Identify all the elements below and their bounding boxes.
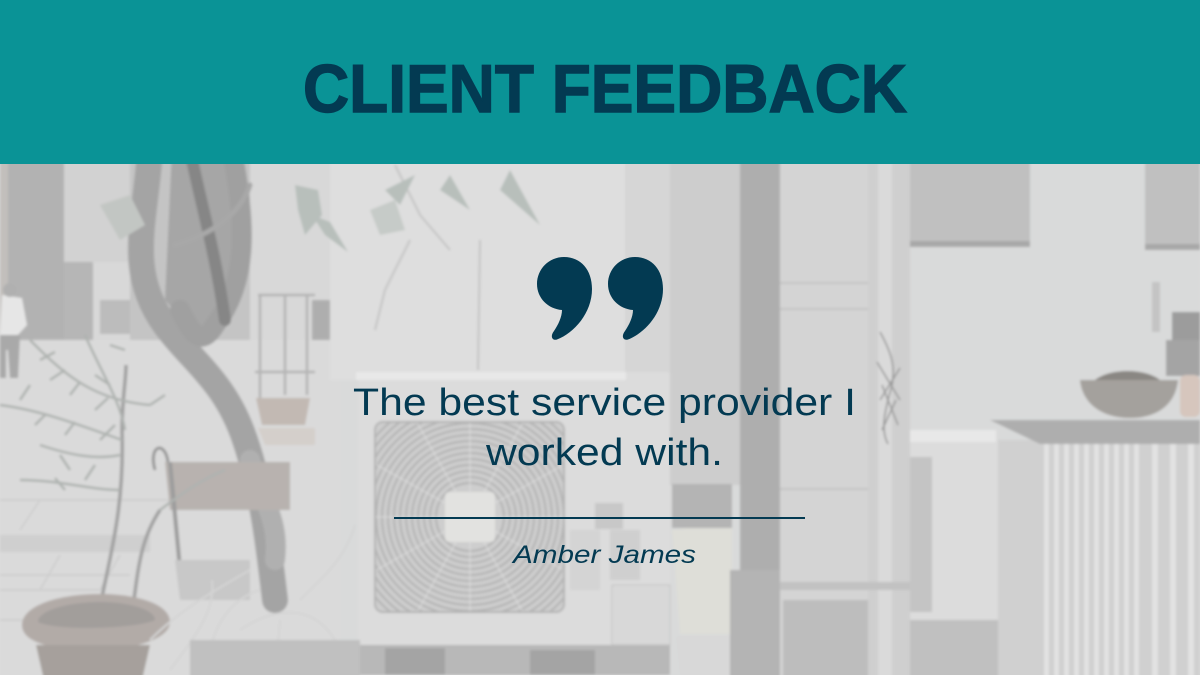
second air conditioner (910, 430, 1000, 675)
header banner (0, 0, 1200, 164)
chair (153, 448, 290, 600)
bucket (671, 484, 733, 529)
trellis and small pot (255, 295, 315, 445)
title: CLIENT FEEDBACK (303, 51, 907, 127)
divider line (394, 517, 805, 519)
testimonial quote (353, 382, 856, 474)
slatted box (990, 420, 1200, 675)
pipes (730, 150, 910, 675)
tree trunk (141, 150, 276, 600)
leaves (100, 170, 540, 252)
pavement (0, 500, 149, 590)
wall behind AC (328, 299, 334, 341)
air conditioner unit (356, 372, 670, 675)
floor shadow (190, 640, 360, 675)
bowl and pots (1080, 312, 1200, 418)
dry branches (149, 590, 214, 641)
wall cracks (375, 165, 480, 370)
background photo: faded alley scene (0, 150, 1200, 675)
fan grille (376, 422, 564, 612)
person (0, 283, 27, 378)
potted plant (0, 338, 176, 675)
testimonial quote: The best service provider I (353, 382, 856, 424)
client name: Amber James (511, 541, 696, 569)
testimonial quote: worked with. (485, 432, 723, 474)
icon: quotation marks (537, 257, 663, 340)
right wall and windows (909, 164, 1200, 332)
alley buildings (0, 164, 331, 341)
graffiti (877, 332, 900, 444)
